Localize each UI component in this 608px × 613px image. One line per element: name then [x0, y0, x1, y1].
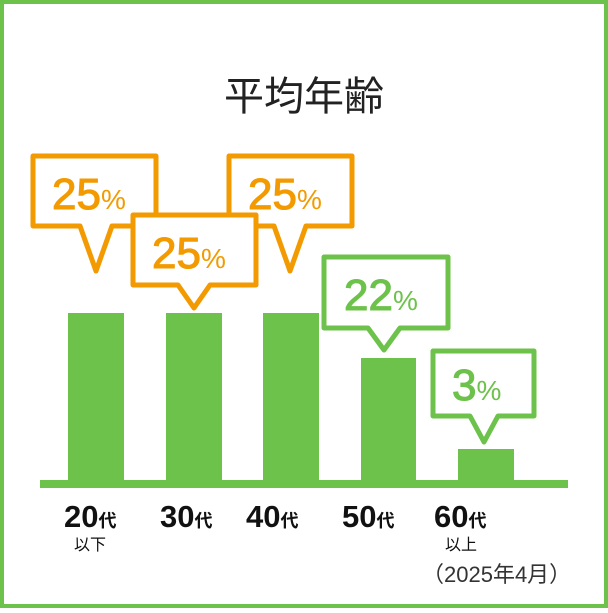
- axis labels: 以上: [445, 536, 477, 554]
- date note: （2025年4月）: [422, 562, 571, 587]
- callout: 60代 3%: 3%: [452, 361, 501, 410]
- axis labels: 30代: [160, 499, 212, 534]
- callout: 50代 22%: [324, 257, 448, 350]
- callout: 30代 25%: [133, 215, 256, 308]
- callout: 20代 25%: 25%: [52, 170, 126, 219]
- callout: 40代 25%: 25%: [248, 170, 322, 219]
- callout: 20代 25%: [33, 156, 156, 271]
- callout: 30代 25%: 25%: [152, 229, 226, 278]
- axis labels: 以下: [74, 537, 106, 554]
- callout: 40代 25%: [229, 156, 352, 271]
- axis labels: 20代: [64, 499, 116, 534]
- callout: 50代 22%: 22%: [344, 271, 418, 320]
- axis labels: 60代: [434, 499, 486, 534]
- axis labels: 40代: [246, 499, 298, 534]
- axis labels: 50代: [342, 499, 394, 534]
- callout: 60代 3%: [433, 351, 534, 442]
- title: 平均年齢: [224, 75, 384, 119]
- bar chart: [40, 313, 568, 488]
- axis labels: [64, 499, 486, 554]
